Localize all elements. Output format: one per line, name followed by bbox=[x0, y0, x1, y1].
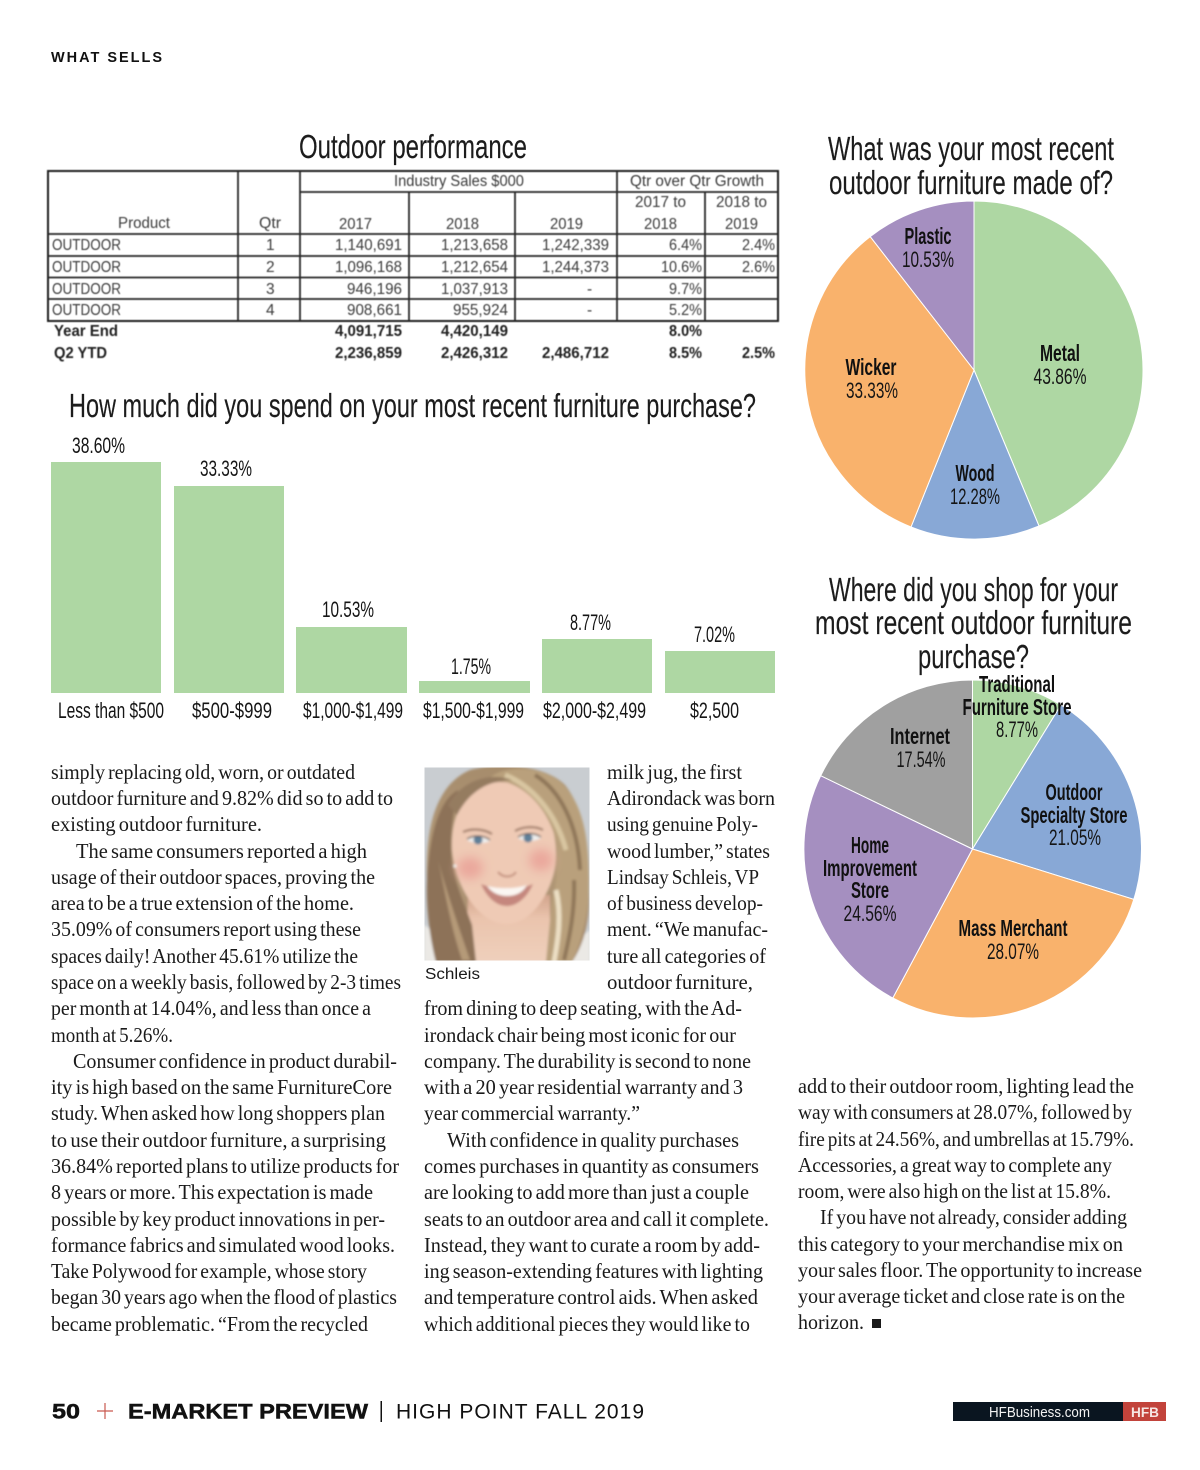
body text: column 2: from dining to deep seating, with the Ad- bbox=[424, 996, 742, 1020]
body text: column 2: milk jug, the first bbox=[607, 760, 742, 784]
bar: $1,000-$1,499: $1,000-$1,499 bbox=[303, 698, 403, 723]
bar: $500-$999: 33.33% bbox=[200, 456, 252, 481]
label: wicker: 33.33% bbox=[846, 378, 898, 403]
bar: less than $500: 38.60% bbox=[72, 433, 125, 458]
body text: column 3: way with consumers at 28.07%, followed by bbox=[798, 1100, 1132, 1124]
body text: column 3: room, were also high on the list at 15.8%. bbox=[798, 1179, 1111, 1203]
table: outdoor industry sales: 946,196 bbox=[347, 281, 402, 298]
bar: $1,500-$1,999: $1,500-$1,999 bbox=[423, 698, 524, 723]
table: outdoor industry sales: 5.2% bbox=[669, 302, 702, 319]
label: home improvement store: 24.56% bbox=[844, 901, 896, 926]
label: outdoor specialty store: 21.05% bbox=[1049, 825, 1101, 850]
table: outdoor industry sales: 2017 bbox=[339, 216, 372, 233]
table: outdoor industry sales: 8.5% bbox=[669, 345, 702, 362]
table: outdoor industry sales: 2.6% bbox=[742, 259, 775, 276]
label: home improvement store: Store bbox=[851, 877, 889, 903]
label: mass merchant bbox=[958, 915, 1068, 964]
table: outdoor industry sales: 2,426,312 bbox=[441, 345, 508, 362]
footer: page number and section: HIGH POINT FALL 2019 bbox=[396, 1400, 644, 1424]
label: wood: 12.28% bbox=[950, 484, 1000, 509]
body text: column 2: outdoor furniture, bbox=[607, 970, 753, 994]
body text: column 1: ity is high based on the same FurnitureCore bbox=[51, 1075, 392, 1099]
section label: WHAT SELLS bbox=[51, 50, 162, 66]
body text: column 2: ture all categories of bbox=[607, 944, 766, 968]
table: outdoor industry sales: 2.5% bbox=[742, 345, 775, 362]
body text: column 2: using genuine Poly- bbox=[607, 812, 758, 836]
table: outdoor industry sales: 6.4% bbox=[669, 237, 702, 254]
label: home improvement store: Improvement bbox=[823, 855, 917, 881]
footer: website badge: HFBusiness.com bbox=[989, 1405, 1090, 1421]
label: traditional furniture store bbox=[962, 671, 1072, 742]
table: outdoor industry sales: 908,661 bbox=[347, 302, 402, 319]
label: internet bbox=[890, 723, 950, 772]
label: internet: 17.54% bbox=[896, 747, 946, 772]
body text: column 1: study. When asked how long shoppers plan bbox=[51, 1101, 385, 1125]
label: mass merchant: Mass Merchant bbox=[958, 915, 1068, 941]
bar: less than $500: Less than $500 bbox=[58, 698, 164, 723]
table: outdoor industry sales bbox=[48, 171, 778, 362]
body text: column 2: and temperature control aids. When asked bbox=[424, 1285, 758, 1309]
body text: column 2: irondack chair being most iconic for our bbox=[424, 1023, 736, 1047]
heading: store question: purchase? bbox=[918, 638, 1029, 675]
table: outdoor industry sales: Product bbox=[118, 215, 171, 232]
body text: column 1: possible by key product innovations in per- bbox=[51, 1207, 385, 1231]
body text: column 2: seats to an outdoor area and call it complete. bbox=[424, 1207, 769, 1231]
body text: column 1: formance fabrics and simulated wood looks. bbox=[51, 1233, 395, 1257]
body text: column 1: Consumer confidence in product durabil- bbox=[73, 1049, 397, 1073]
body text: column 3: Accessories, a great way to complete any bbox=[798, 1153, 1112, 1177]
body text: column 3 bbox=[798, 1074, 1142, 1334]
photo: portrait of Lindsay Schleis bbox=[424, 766, 590, 962]
table: outdoor industry sales: 8.0% bbox=[669, 323, 702, 340]
label: traditional furniture store: Furniture Store bbox=[962, 694, 1072, 720]
label: internet: Internet bbox=[890, 723, 950, 749]
body text: column 1: 35.09% of consumers report using these bbox=[51, 917, 361, 941]
body text: column 1: became problematic. “From the recycled bbox=[51, 1312, 368, 1336]
table: outdoor industry sales: 1,140,691 bbox=[335, 237, 402, 254]
body text: column 1: 8 years or more. This expectation is made bbox=[51, 1180, 373, 1204]
table: outdoor industry sales: 2.4% bbox=[742, 237, 775, 254]
footer: page number and section: E-MARKET PREVIEW bbox=[128, 1400, 368, 1424]
body text: column 1: simply replacing old, worn, or outdated bbox=[51, 760, 355, 784]
bar: $2,500 bbox=[665, 622, 775, 723]
table: outdoor industry sales: 2,236,859 bbox=[335, 345, 402, 362]
table: outdoor industry sales: OUTDOOR bbox=[52, 259, 121, 276]
body text: column 2: Lindsay Schleis, VP bbox=[607, 865, 759, 889]
table: outdoor industry sales: OUTDOOR bbox=[52, 281, 121, 298]
table: outdoor industry sales: 2018 bbox=[446, 216, 479, 233]
table: outdoor industry sales: 1,242,339 bbox=[542, 237, 609, 254]
table: outdoor industry sales: OUTDOOR bbox=[52, 237, 121, 254]
heading: store question bbox=[815, 571, 1132, 675]
footer: page number and section bbox=[52, 1400, 644, 1424]
body text: column 2: are looking to add more than just a couple bbox=[424, 1180, 749, 1204]
body text: column 1: 36.84% reported plans to utilize products for bbox=[51, 1154, 399, 1178]
label: plastic: 10.53% bbox=[902, 247, 954, 272]
body text: column 1: month at 5.26%. bbox=[51, 1023, 173, 1047]
body text: column 2 bbox=[424, 760, 775, 1336]
bar: $2,000-$2,499: $2,000-$2,499 bbox=[543, 698, 646, 723]
heading: material question bbox=[828, 130, 1114, 201]
label: mass merchant: 28.07% bbox=[987, 939, 1039, 964]
body text: column 2: wood lumber,” states bbox=[607, 839, 770, 863]
bar: $500-$999: $500-$999 bbox=[192, 698, 272, 723]
table: outdoor industry sales: 10.6% bbox=[661, 259, 702, 276]
body text: column 3: your average ticket and close rate is on the bbox=[798, 1284, 1125, 1308]
label: wood: Wood bbox=[956, 460, 994, 486]
table: outdoor industry sales: - bbox=[587, 302, 592, 319]
body text: column 3: your sales floor. The opportunity to increase bbox=[798, 1258, 1142, 1282]
body text: column 1: area to be a true extension of the home. bbox=[51, 891, 354, 915]
body text: column 1: outdoor furniture and 9.82% did so to add to bbox=[51, 786, 393, 810]
table: outdoor industry sales: 2,486,712 bbox=[542, 345, 609, 362]
table: outdoor industry sales: Industry Sales $000 bbox=[394, 173, 524, 190]
table: outdoor industry sales: - bbox=[587, 281, 592, 298]
body text: column 1: Take Polywood for example, whose story bbox=[51, 1259, 367, 1283]
table: outdoor industry sales: 1 bbox=[266, 237, 275, 254]
body text: column 1: The same consumers reported a high bbox=[76, 839, 367, 863]
body text: column 1: space on a weekly basis, followed by 2-3 times bbox=[51, 970, 401, 994]
body text: column 2: comes purchases in quantity as consumers bbox=[424, 1154, 759, 1178]
body text: column 1: per month at 14.04%, and less than once a bbox=[51, 996, 372, 1020]
body text: column 2: year commercial warranty.” bbox=[424, 1101, 640, 1125]
bar: $1,500-$1,999: 1.75% bbox=[451, 654, 491, 679]
table: outdoor industry sales: 2018 to bbox=[716, 194, 767, 211]
label: metal: 43.86% bbox=[1034, 364, 1086, 389]
table: outdoor industry sales: 2018 bbox=[644, 216, 677, 233]
label: outdoor specialty store: Specialty Store bbox=[1020, 802, 1128, 828]
body text: column 2: which additional pieces they would like to bbox=[424, 1312, 750, 1336]
body text: column 2: With confidence in quality purchases bbox=[447, 1128, 739, 1152]
table: outdoor industry sales: 1,212,654 bbox=[441, 259, 508, 276]
label: metal bbox=[1034, 340, 1086, 389]
bar: $1,500-$1,999 bbox=[419, 654, 530, 723]
table: outdoor industry sales: 1,096,168 bbox=[335, 259, 402, 276]
body text: column 3: horizon. bbox=[798, 1310, 864, 1334]
table: outdoor industry sales: 4,091,715 bbox=[335, 323, 402, 340]
body text: column 1 bbox=[51, 760, 401, 1336]
body text: column 3: add to their outdoor room, lighting lead the bbox=[798, 1074, 1134, 1098]
body text: column 1: began 30 years ago when the flood of plastics bbox=[51, 1285, 397, 1309]
body text: column 1: spaces daily! Another 45.61% utilize the bbox=[51, 944, 358, 968]
table: outdoor industry sales: 2 bbox=[266, 259, 275, 276]
body text: column 1: usage of their outdoor spaces, proving the bbox=[51, 865, 375, 889]
bar: $2,500: 7.02% bbox=[694, 622, 735, 647]
label: wood bbox=[950, 460, 1000, 509]
body text: column 2: ment. “We manufac- bbox=[607, 917, 768, 941]
table: outdoor industry sales: 2017 to bbox=[635, 194, 686, 211]
body text: column 2: ing season-extending features with lighting bbox=[424, 1259, 763, 1283]
label: traditional furniture store: 8.77% bbox=[996, 717, 1038, 742]
footer: website badge: HFB bbox=[1131, 1404, 1159, 1420]
body text: column 2: company. The durability is second to none bbox=[424, 1049, 751, 1073]
label: plastic: Plastic bbox=[904, 223, 952, 249]
body text: column 3: fire pits at 24.56%, and umbrellas at 15.79%. bbox=[798, 1127, 1134, 1151]
table: outdoor industry sales: 4 bbox=[266, 302, 275, 319]
body text: column 2: with a 20 year residential warranty and 3 bbox=[424, 1075, 743, 1099]
table: outdoor industry sales: Year End bbox=[54, 323, 118, 340]
table: outdoor industry sales: 1,213,658 bbox=[441, 237, 508, 254]
footer: website badge bbox=[953, 1402, 1166, 1421]
table: outdoor industry sales: 4,420,149 bbox=[441, 323, 508, 340]
table: outdoor industry sales: OUTDOOR bbox=[52, 302, 121, 319]
table: outdoor industry sales: 1,244,373 bbox=[542, 259, 609, 276]
bar: $2,000-$2,499: 8.77% bbox=[570, 610, 611, 635]
label: home improvement store bbox=[823, 832, 917, 926]
body text: column 1: to use their outdoor furniture, a surprising bbox=[51, 1128, 386, 1152]
table: outdoor industry sales: 2019 bbox=[725, 216, 758, 233]
heading: purchase spend: How much did you spend on your most recent furniture purchase? bbox=[69, 387, 756, 424]
body text: column 2: of business develop- bbox=[607, 891, 763, 915]
bar: $500-$999 bbox=[174, 456, 284, 723]
pie chart: store type bbox=[804, 671, 1141, 1018]
label: traditional furniture store: Traditional bbox=[979, 671, 1055, 697]
bar: $1,000-$1,499 bbox=[296, 597, 407, 723]
body text: column 3: If you have not already, consider adding bbox=[820, 1205, 1127, 1229]
table: outdoor industry sales: Qtr bbox=[259, 215, 281, 232]
label: plastic bbox=[902, 223, 954, 272]
caption: Schleis: Schleis bbox=[425, 966, 480, 983]
heading: outdoor performance: Outdoor performance bbox=[299, 128, 527, 165]
body text: column 3: this category to your merchandise mix on bbox=[798, 1232, 1123, 1256]
table: outdoor industry sales: 1,037,913 bbox=[441, 281, 508, 298]
table: outdoor industry sales: 9.7% bbox=[669, 281, 702, 298]
bar: less than $500 bbox=[51, 433, 164, 723]
body text: column 2: Adirondack was born bbox=[607, 786, 775, 810]
bar chart: purchase spend bbox=[51, 433, 775, 723]
table: outdoor industry sales: 2019 bbox=[550, 216, 583, 233]
bar: $1,000-$1,499: 10.53% bbox=[322, 597, 374, 622]
bar: $2,500: $2,500 bbox=[690, 698, 739, 723]
body text: column 2: Instead, they want to curate a room by add- bbox=[424, 1233, 760, 1257]
table: outdoor industry sales: Qtr over Qtr Growth bbox=[630, 173, 764, 190]
label: wicker bbox=[846, 354, 898, 403]
footer: page number and section: 50 bbox=[52, 1400, 80, 1424]
label: wicker: Wicker bbox=[846, 354, 897, 380]
table: outdoor industry sales: 3 bbox=[266, 281, 275, 298]
body text: column 1: existing outdoor furniture. bbox=[51, 812, 262, 836]
label: outdoor specialty store: Outdoor bbox=[1046, 779, 1103, 805]
pie chart: material bbox=[805, 201, 1143, 539]
label: metal: Metal bbox=[1040, 340, 1080, 366]
label: outdoor specialty store bbox=[1020, 779, 1128, 850]
bar: $2,000-$2,499 bbox=[542, 610, 652, 723]
table: outdoor industry sales: 955,924 bbox=[453, 302, 508, 319]
table: outdoor industry sales: Q2 YTD bbox=[54, 345, 107, 362]
label: home improvement store: Home bbox=[851, 832, 889, 858]
